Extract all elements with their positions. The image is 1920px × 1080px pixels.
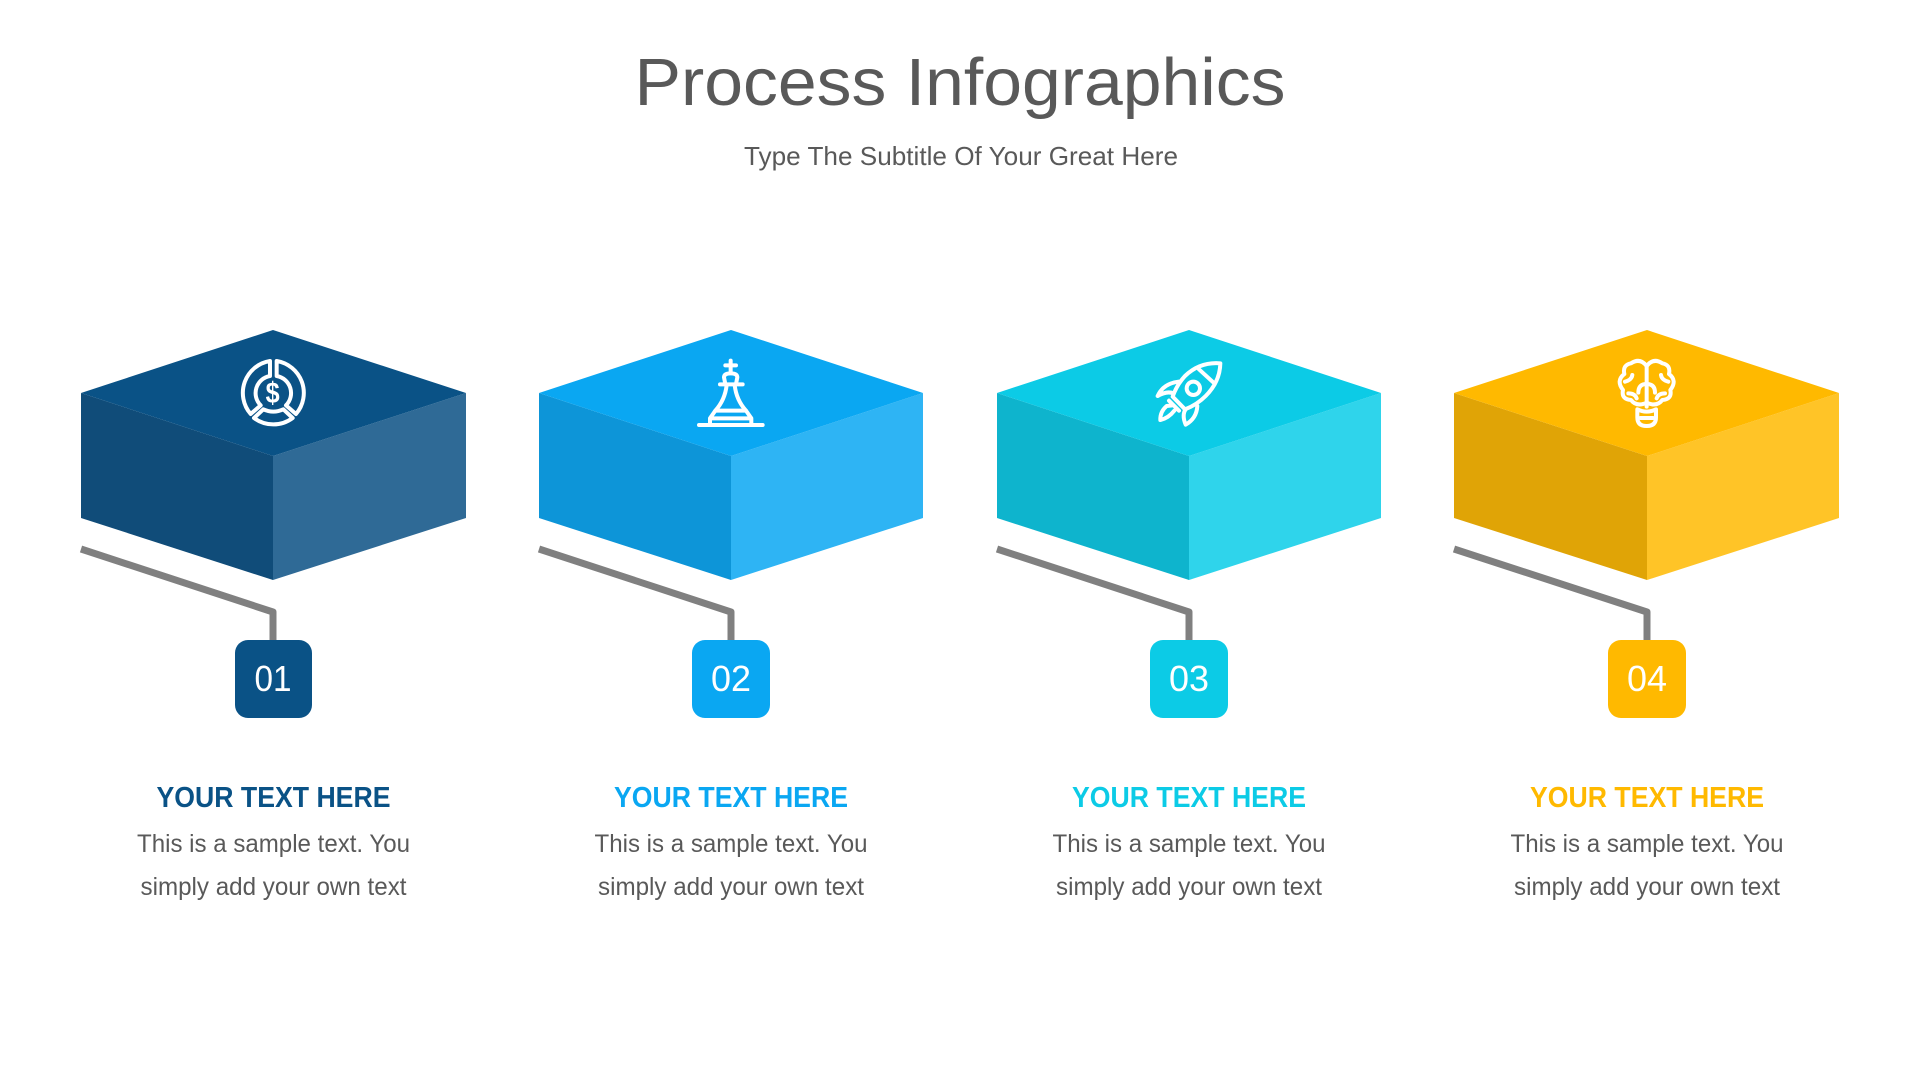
number badge 04 xyxy=(1608,640,1686,718)
body text 04: This is a sample text. You xyxy=(1510,830,1784,858)
body text 02 xyxy=(594,830,868,901)
body text 01: simply add your own text xyxy=(140,873,407,901)
heading 02: YOUR TEXT HERE xyxy=(614,782,848,814)
panel: step 04 xyxy=(1454,330,1839,901)
body text 01 xyxy=(137,830,410,901)
number badge 01 xyxy=(235,640,312,718)
connector line 02 xyxy=(539,549,731,641)
connector line 03 xyxy=(997,549,1189,641)
isometric box 03 xyxy=(997,330,1381,580)
body text 02: This is a sample text. You xyxy=(594,830,868,858)
number badge 01: 01 xyxy=(254,658,292,699)
isometric box 01 xyxy=(81,330,466,580)
isometric box 04 xyxy=(1454,330,1839,580)
heading 04: YOUR TEXT HERE xyxy=(1530,782,1764,814)
icon: chess king xyxy=(699,361,763,425)
title: Process Infographics xyxy=(634,45,1286,120)
heading 01: YOUR TEXT HERE xyxy=(156,782,390,814)
icon: dollar target: $ xyxy=(266,377,280,410)
number badge 02 xyxy=(692,640,770,718)
body text 02: simply add your own text xyxy=(598,873,864,901)
heading 03: YOUR TEXT HERE xyxy=(1072,782,1306,814)
icon: rocket xyxy=(1158,363,1220,425)
number badge 04: 04 xyxy=(1627,658,1667,699)
body text 01: This is a sample text. You xyxy=(137,830,410,858)
body text 04: simply add your own text xyxy=(1514,873,1780,901)
body text 03: simply add your own text xyxy=(1056,873,1322,901)
connector line 01 xyxy=(81,549,273,641)
number badge 03 xyxy=(1150,640,1228,718)
body text 03: This is a sample text. You xyxy=(1052,830,1326,858)
panel: step 02 xyxy=(539,330,923,901)
panel: step 01 xyxy=(81,330,466,901)
number badge 02: 02 xyxy=(711,658,751,699)
panel: step 03 xyxy=(997,330,1381,901)
isometric box 02 xyxy=(539,330,923,580)
subtitle: Type The Subtitle Of Your Great Here xyxy=(744,141,1178,171)
body text 04 xyxy=(1510,830,1784,901)
body text 03 xyxy=(1052,830,1326,901)
number badge 03: 03 xyxy=(1169,658,1209,699)
icon: brain bulb xyxy=(1620,361,1674,426)
icon: dollar target xyxy=(243,361,304,424)
connector line 04 xyxy=(1454,549,1647,641)
